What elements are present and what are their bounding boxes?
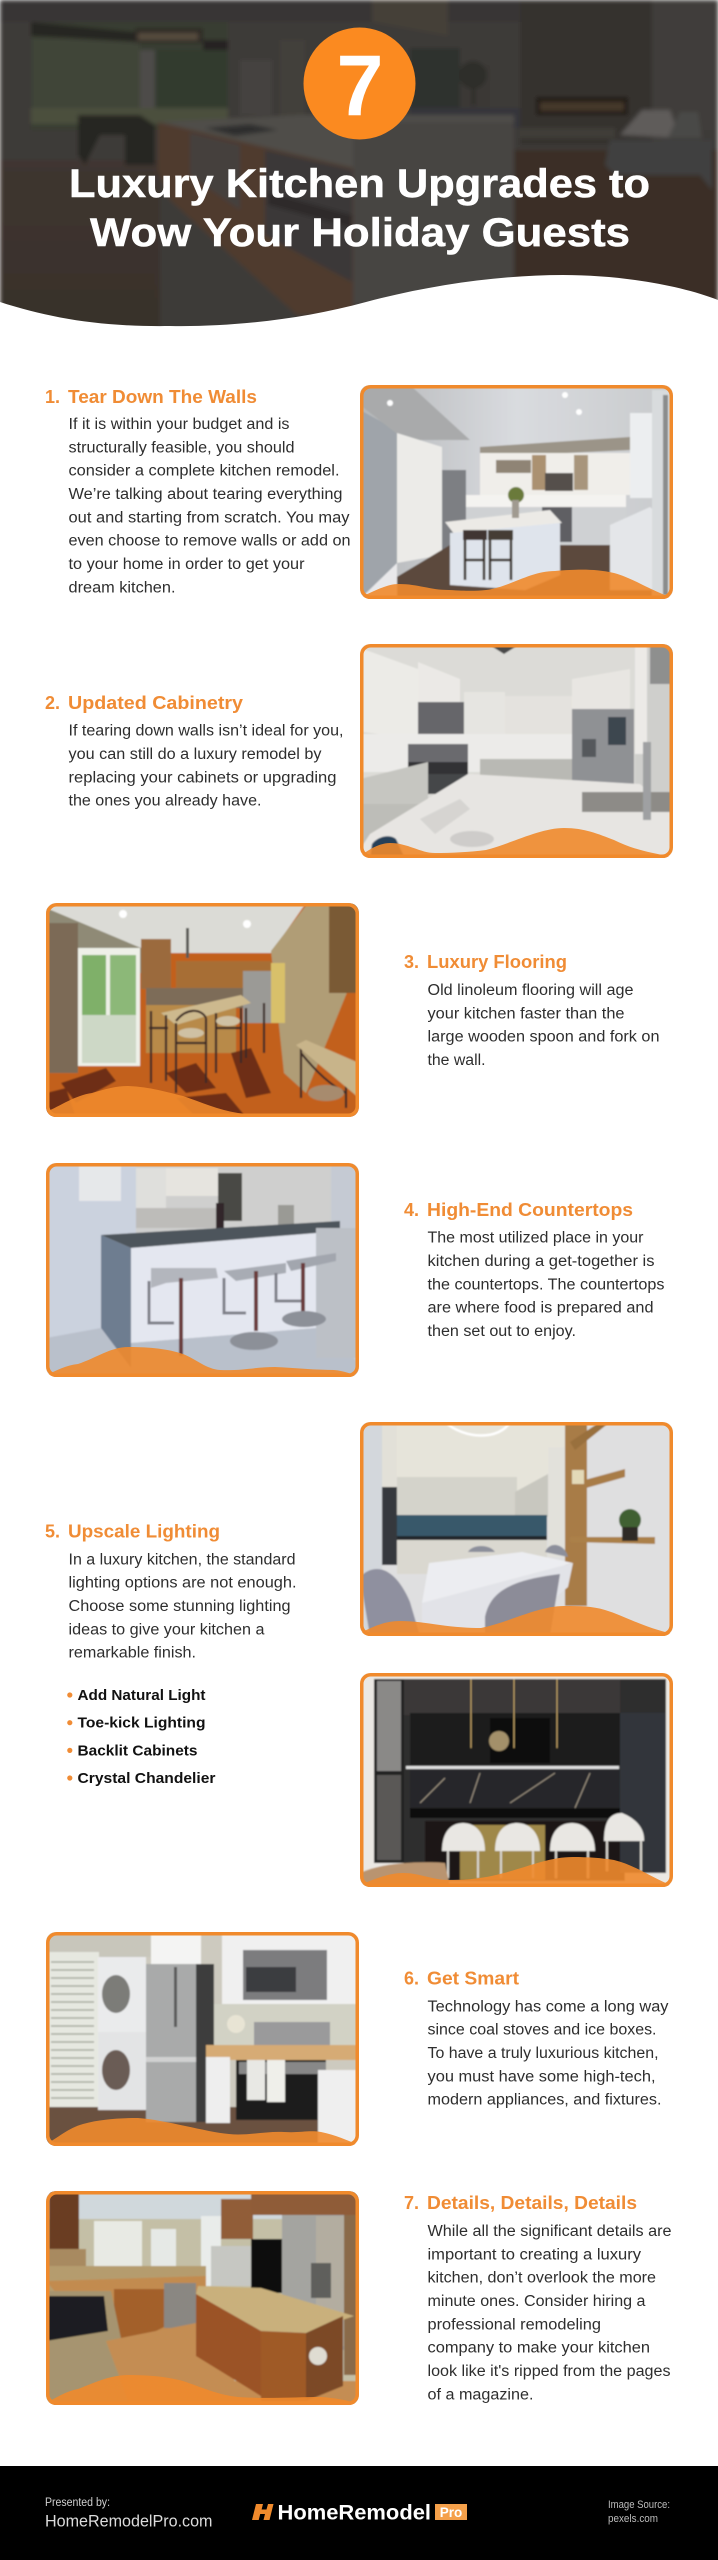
image source: [608, 2499, 670, 2525]
heading: Get Smart: [427, 1968, 519, 1988]
logo: HomeRemodel Pro: Pro: [440, 2505, 462, 2520]
presented by: HomeRemodelPro.com: [45, 2512, 212, 2530]
body text: since coal stoves and ice boxes.: [428, 2022, 656, 2039]
image source: Image Source:: [608, 2499, 670, 2511]
heading: Tear Down The Walls: [68, 387, 257, 407]
body text: out and starting from scratch. You may: [68, 509, 350, 526]
body text: kitchen, don’t overlook the more: [428, 2270, 656, 2287]
heading: Upscale Lighting: [68, 1522, 220, 1542]
logo: HomeRemodel Pro: [252, 2502, 467, 2524]
body text: Choose some stunning lighting: [68, 1598, 290, 1615]
body text: To have a truly luxurious kitchen,: [428, 2045, 658, 2062]
photo: dark luxury kitchen with chandelier: [360, 1673, 673, 1887]
body text: We’re talking about tearing everything: [68, 486, 342, 503]
heading: 6.: [404, 1968, 419, 1988]
panel: step 4 high-end countertops: [46, 1163, 665, 1377]
body text: then set out to enjoy.: [428, 1323, 576, 1340]
heading: 3.: [404, 952, 419, 972]
body text: company to make your kitchen: [428, 2340, 650, 2357]
body text: If tearing down walls isn’t ideal for you,: [68, 723, 344, 740]
title: Luxury Kitchen Upgrades to: [69, 162, 650, 206]
body text: professional remodeling: [428, 2316, 601, 2333]
body text: of a magazine.: [428, 2386, 534, 2403]
image source: pexels.com: [608, 2513, 658, 2525]
footer: [0, 2466, 718, 2560]
panel: step 3 luxury flooring: [46, 903, 660, 1117]
badge: number 7 circle: 7: [336, 38, 384, 134]
body text: [68, 723, 344, 810]
background kitchen photo darkened: [0, 0, 718, 340]
logo: HomeRemodel Pro: HomeRemodel: [278, 2502, 431, 2524]
badge: number 7 circle: [304, 28, 416, 140]
body text: Technology has come a long way: [428, 1998, 669, 2015]
heading: 2.: [45, 693, 60, 713]
body text: [428, 1230, 665, 1340]
panel: step 5 upscale lighting: [45, 1422, 673, 1887]
photo: white kitchen with island: [360, 385, 673, 599]
panel: header photo with title: [0, 0, 718, 340]
body text: [68, 416, 350, 596]
body text: replacing your cabinets or upgrading: [68, 769, 336, 786]
body text: ideas to give your kitchen a: [68, 1621, 265, 1638]
body text: kitchen during a get-together is: [428, 1253, 655, 1270]
bullet list: Crystal Chandelier: [78, 1770, 216, 1787]
bullet list: Add Natural Light: [78, 1687, 206, 1704]
presented by: [45, 2497, 212, 2530]
body text: lighting options are not enough.: [68, 1575, 296, 1592]
title: [69, 162, 650, 255]
body text: The most utilized place in your: [428, 1230, 644, 1247]
photo: stainless appliances kitchen: [46, 1932, 359, 2146]
panel: step 1 tear down the walls: [45, 385, 673, 599]
body text: [68, 1551, 296, 1662]
body text: [428, 982, 660, 1069]
bullet list: [67, 1687, 216, 1787]
body text: the wall.: [428, 1052, 486, 1069]
heading: 4.: [404, 1200, 419, 1220]
body text: important to creating a luxury: [428, 2246, 641, 2263]
presented by: Presented by:: [45, 2497, 110, 2509]
body text: [428, 2223, 672, 2403]
heading: 5.: [45, 1522, 60, 1542]
body text: the ones you already have.: [68, 793, 262, 810]
body text: minute ones. Consider hiring a: [428, 2293, 646, 2310]
body text: you must have some high-tech,: [428, 2068, 656, 2085]
body text: you can still do a luxury remodel by: [68, 746, 322, 763]
body text: modern appliances, and fixtures.: [428, 2092, 662, 2109]
title: Wow Your Holiday Guests: [90, 211, 630, 255]
body text: While all the significant details are: [428, 2223, 672, 2240]
body text: the countertops. The countertops: [428, 1276, 665, 1293]
body text: are where food is prepared and: [428, 1300, 654, 1317]
body text: look like it's ripped from the pages: [428, 2363, 671, 2380]
body text: your kitchen faster than the: [428, 1005, 624, 1022]
heading: 7.: [404, 2193, 419, 2213]
photo: hardwood floor kitchen: [46, 903, 359, 1117]
heading: Updated Cabinetry: [68, 693, 243, 713]
photo: bright modern dining kitchen: [360, 1422, 673, 1636]
body text: structurally feasible, you should: [68, 439, 294, 456]
body text: even choose to remove walls or add on: [68, 533, 350, 550]
body text: consider a complete kitchen remodel.: [68, 463, 340, 480]
panel: step 2 updated cabinetry: [45, 644, 673, 858]
heading: 1.: [45, 387, 60, 407]
body text: to your home in order to get your: [68, 556, 304, 573]
body text: In a luxury kitchen, the standard: [68, 1551, 296, 1568]
body text: remarkable finish.: [68, 1645, 196, 1662]
photo: bar counter with stools: [46, 1163, 359, 1377]
bullet list: Toe-kick Lighting: [78, 1715, 206, 1732]
heading: High-End Countertops: [427, 1200, 633, 1220]
photo: white cabinets and marble counter: [360, 644, 673, 858]
heading: Luxury Flooring: [427, 952, 567, 972]
heading: Details, Details, Details: [427, 2193, 637, 2213]
body text: Old linoleum flooring will age: [428, 982, 634, 999]
panel: step 6 get smart: [46, 1932, 669, 2146]
bullet list: Backlit Cabinets: [78, 1742, 198, 1759]
body text: If it is within your budget and is: [68, 416, 290, 433]
body text: large wooden spoon and fork on: [428, 1029, 660, 1046]
panel: step 7 details: [46, 2191, 672, 2405]
body text: dream kitchen.: [68, 579, 176, 596]
photo: wood cabinet kitchen with granite: [46, 2191, 359, 2405]
body text: [428, 1998, 669, 2109]
